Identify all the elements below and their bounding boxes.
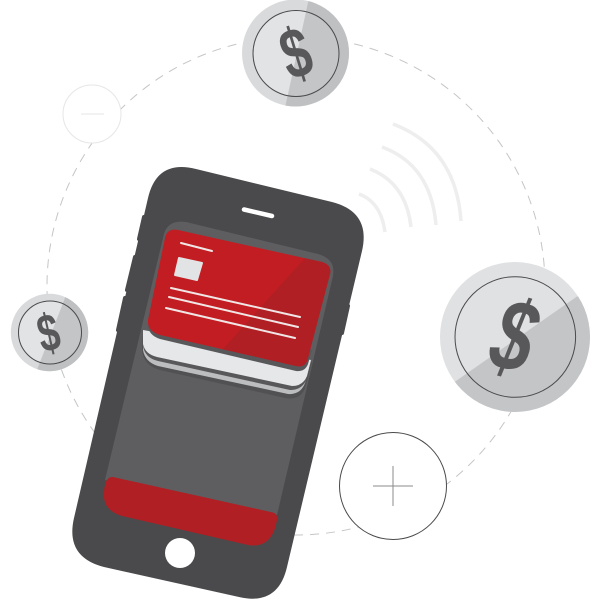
phone home button — [165, 538, 195, 568]
phone screen — [105, 222, 333, 515]
coin: left — [11, 294, 88, 371]
card chip — [175, 258, 202, 280]
coin: right: $ — [480, 276, 549, 396]
coin: left: $ — [31, 301, 66, 364]
coin: top — [242, 0, 349, 106]
card stack shadow — [142, 335, 312, 398]
card stack dark line — [143, 335, 311, 390]
red bar on screen — [104, 477, 277, 545]
card shade — [222, 258, 330, 366]
phone — [72, 167, 364, 599]
coin: top: $ — [271, 12, 321, 96]
wallet cards — [142, 230, 340, 398]
red credit card — [148, 230, 330, 366]
phone speaker — [244, 210, 272, 216]
icon: wireless waves — [359, 124, 461, 232]
card text lines — [166, 243, 300, 338]
phone side buttons — [118, 217, 348, 333]
card stack middle layer — [143, 335, 311, 394]
icon: minus circle — [63, 85, 121, 143]
gap under red card — [148, 322, 312, 371]
coin: right — [440, 262, 590, 412]
white card — [143, 330, 311, 386]
icon: plus circle — [340, 432, 446, 540]
phone body — [72, 167, 364, 599]
dashed orbit circle — [47, 37, 545, 535]
